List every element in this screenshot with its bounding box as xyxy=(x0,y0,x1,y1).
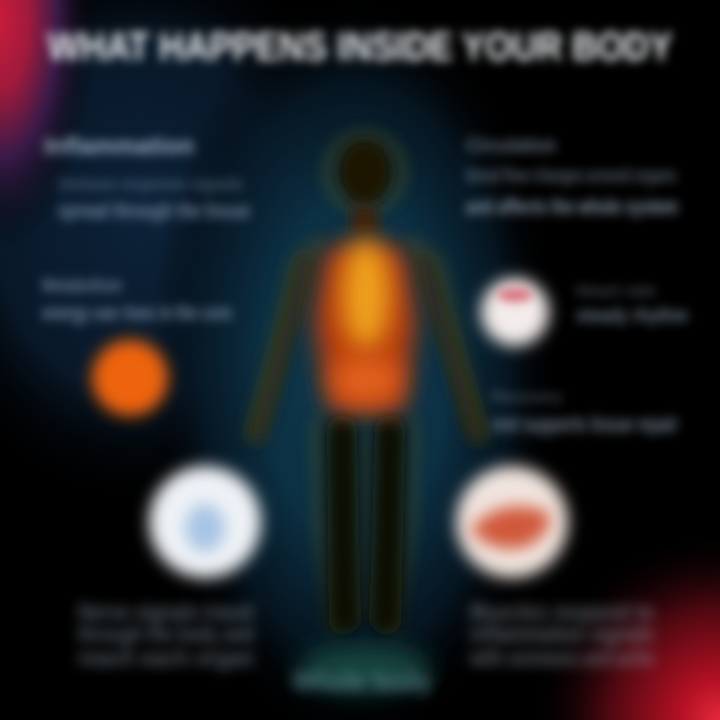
text block: bottom left xyxy=(78,599,254,672)
figure: human body xyxy=(250,136,484,690)
text block: bottom centre: Whole body xyxy=(292,666,433,696)
text block: top right xyxy=(466,135,678,219)
text block: bottom right: inflammation signals xyxy=(470,621,654,648)
text block: middle right: steady rhythm xyxy=(576,305,688,327)
text block: top left xyxy=(44,133,250,223)
icon: white circle with red top xyxy=(481,278,549,346)
text block: top left: immune response signals xyxy=(58,174,243,194)
figure glow outline xyxy=(250,136,484,635)
text block: bottom left: Nerve signals travel xyxy=(78,599,254,626)
neck xyxy=(352,205,378,235)
text block: bottom left: through the body and xyxy=(78,621,254,648)
text block: top right: Circulation xyxy=(466,135,556,157)
icon: white circle with muscle tissue xyxy=(456,466,568,578)
text block: lower right xyxy=(492,389,678,438)
icon: white circle with blue cells xyxy=(149,466,261,578)
feet xyxy=(299,646,431,690)
text block: bottom left: reach each organ xyxy=(78,645,254,672)
figure arms xyxy=(258,262,476,436)
figure legs xyxy=(342,430,390,620)
text block: middle right xyxy=(576,283,688,327)
text block: middle left xyxy=(42,275,232,325)
text block: bottom right xyxy=(469,599,654,672)
spine glow xyxy=(342,240,390,350)
icon: orange circle xyxy=(92,340,168,416)
text block: middle right: Heart rate xyxy=(576,283,656,300)
figure torso xyxy=(314,244,416,412)
text block: middle left: Metabolism xyxy=(42,275,122,297)
figure head xyxy=(339,140,391,204)
text block: bottom right: Muscles respond to xyxy=(470,599,654,626)
lower abdomen glow xyxy=(332,356,400,404)
text block: top left: spread through the tissue xyxy=(58,198,250,223)
text block: middle left: energy use rises in the core xyxy=(42,300,232,325)
text block: lower right: Recovery xyxy=(492,389,562,406)
text block: top left: Inflammation xyxy=(44,133,194,160)
